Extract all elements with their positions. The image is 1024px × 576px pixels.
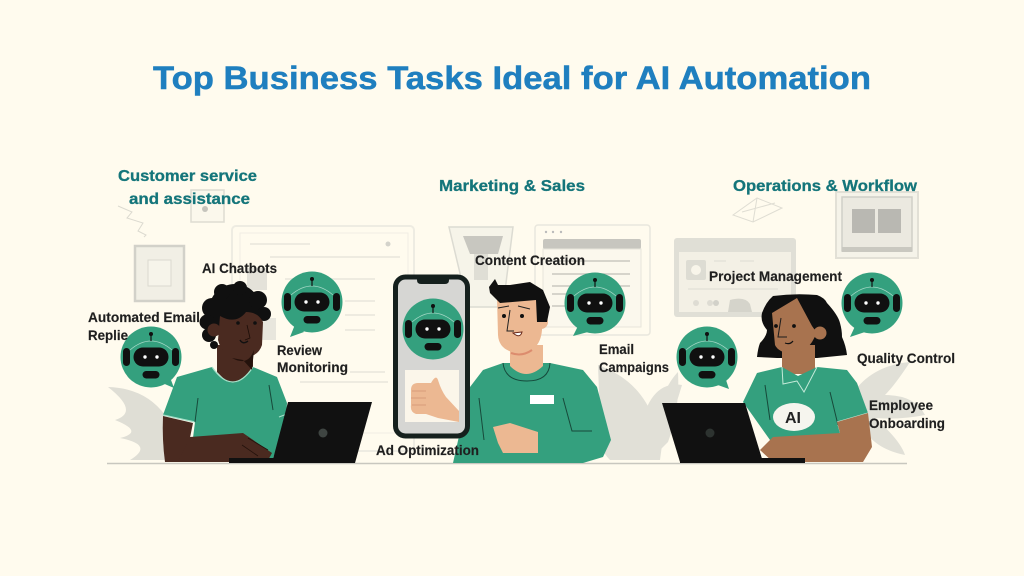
person: left [163,281,287,462]
hair [757,294,847,358]
robot bubble: quality [676,326,738,389]
ground line [107,462,907,464]
label: review monitoring: Monitoring [277,360,348,375]
card: thumbs up [405,370,459,422]
robot bubble: phone [402,298,464,360]
label: review monitoring [277,343,348,375]
robot bubble: email campaigns [564,272,626,336]
person: right: AI [785,410,801,427]
heading: customer service: Customer service [118,168,257,185]
laptop: right [662,403,805,463]
heading: operations: Operations & Workflow [733,178,918,195]
label: email campaigns: Campaigns [599,360,669,375]
robot bubble: automated email [120,326,182,388]
label: email campaigns [599,342,669,375]
label: quality control: Quality Control [857,351,955,366]
label: employee onboarding [869,398,945,431]
phone [396,277,468,436]
plants [108,387,165,460]
robot bubble: review monitoring [282,272,342,337]
title: Top Business Tasks Ideal for AI Automation [153,60,871,96]
person: right [743,294,872,462]
person: centre [453,279,611,463]
heading: marketing: Marketing & Sales [439,178,585,195]
label: review monitoring: Review [277,343,322,358]
label: ad optimization: Ad Optimization [376,443,479,458]
label: automated email replies [88,310,200,343]
heading: customer service [118,168,257,208]
label: project management: Project Management [709,269,842,284]
label: email campaigns: Email [599,342,634,357]
robot bubble: project [842,272,902,337]
label: employee onboarding: Employee [869,398,933,413]
laptop: left [229,402,372,463]
heading: customer service: and assistance [129,191,250,208]
label: automated email replies: Automated Email [88,310,200,325]
label: employee onboarding: Onboarding [869,416,945,431]
hair [200,281,271,349]
label: automated email replies: Replie [88,328,128,343]
background: grey decor [108,190,925,460]
label: content creation: Content Creation [475,253,585,268]
label: ai chatbots: AI Chatbots [202,261,277,276]
